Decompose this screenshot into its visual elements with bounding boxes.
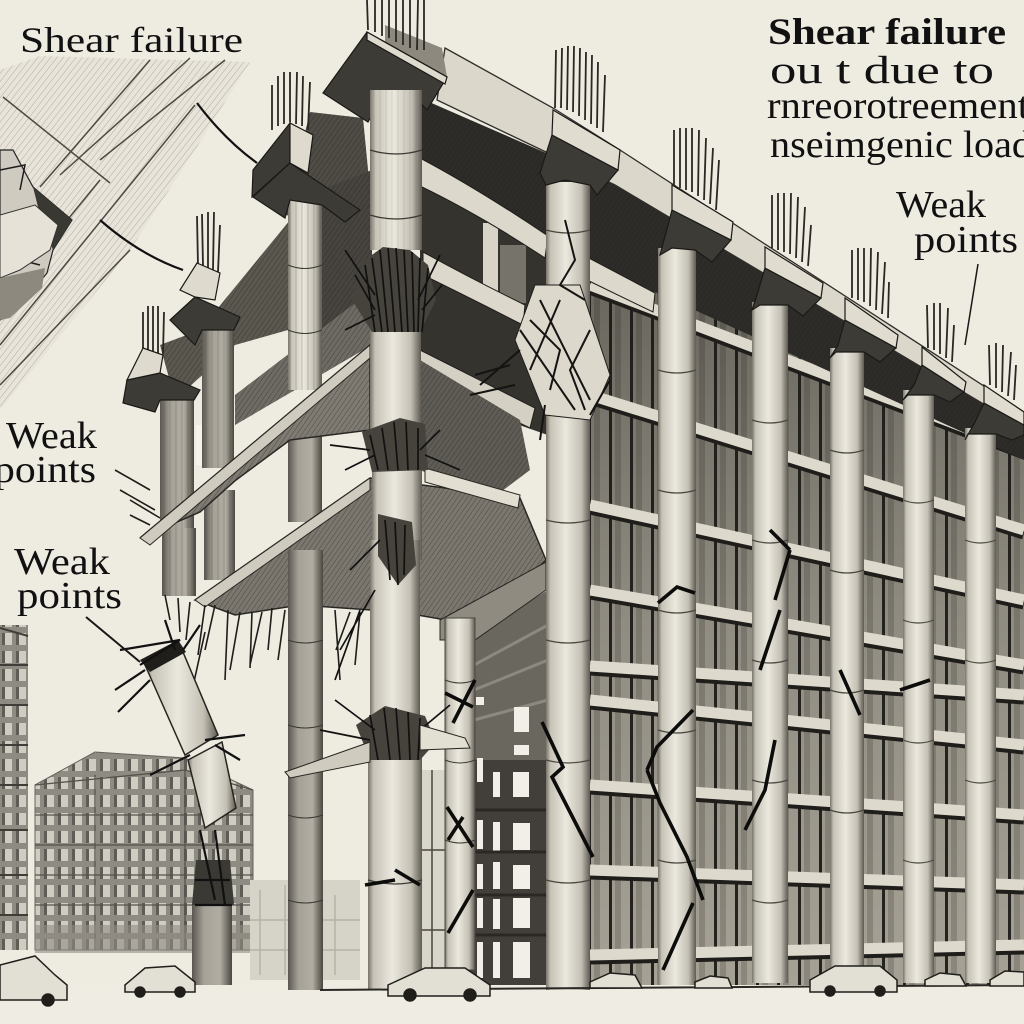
rebar spikes above caps: [555, 46, 1016, 400]
background building: left glass tower: [0, 625, 28, 950]
ledge on right of column: [420, 725, 470, 750]
label: weak points middle left: Weak: [6, 415, 97, 457]
inset: sketched sheared column detail: [0, 56, 257, 410]
broken corner column section: [470, 220, 610, 440]
roof eave underside: [420, 98, 1024, 460]
background building: mid-rise: [35, 752, 360, 980]
label: weak points middle left: [0, 415, 97, 491]
heading: shear failure left: Shear failure: [20, 20, 243, 60]
structural cracks: [365, 530, 930, 970]
facade column caps: dark undersides: [540, 135, 1024, 440]
main front column with shear breaks: [368, 90, 422, 990]
upper cantilever roof slabs: [160, 112, 372, 425]
label: weak points lower left: points: [17, 575, 122, 617]
roof eave top face: [437, 48, 1024, 428]
bursting rebar strands: [320, 248, 465, 760]
heading: shear failure description right: [767, 12, 1024, 166]
upper floors behind the shear zone: [420, 158, 655, 450]
main facade glazing: [590, 200, 1024, 985]
far left columns: [160, 328, 235, 596]
left cap top faces: [127, 32, 447, 380]
hanging rebar below slab: [115, 470, 360, 700]
heading: shear failure description right: ou t due to: [770, 49, 994, 92]
parked cars: [0, 956, 1024, 1006]
heading: shear failure description right: rnreorotreement: [767, 85, 1024, 127]
lower recessed bay with windows: [470, 590, 548, 985]
panel left of lower column: [422, 770, 446, 985]
shear damaged floor slab: upper: [140, 345, 530, 545]
rebar spikes above left caps: [143, 0, 424, 354]
label: weak points lower left: [14, 541, 140, 662]
block behind top cap: [385, 25, 447, 77]
heading: shear failure description right: Shear failure: [768, 12, 1006, 53]
shear damaged floor slab: lower: [195, 468, 546, 640]
facade column caps: light top faces: [552, 110, 1024, 425]
label: weak points upper right: [896, 184, 1018, 345]
label: weak points upper right: Weak: [896, 184, 986, 226]
ground: [0, 985, 1024, 1024]
heading: shear failure description right: nseimgenic load: [770, 124, 1024, 166]
lower columns: [288, 550, 475, 990]
label: weak points upper right: points: [914, 219, 1018, 261]
label: weak points lower left: Weak: [14, 541, 110, 583]
shear break rebar bursts on main column: [352, 247, 436, 760]
left column caps: [123, 32, 447, 412]
detached tilted column: [115, 620, 245, 985]
ledge at column base: [285, 742, 370, 778]
facade column row: [546, 182, 996, 990]
column behind slabs: [288, 200, 322, 522]
